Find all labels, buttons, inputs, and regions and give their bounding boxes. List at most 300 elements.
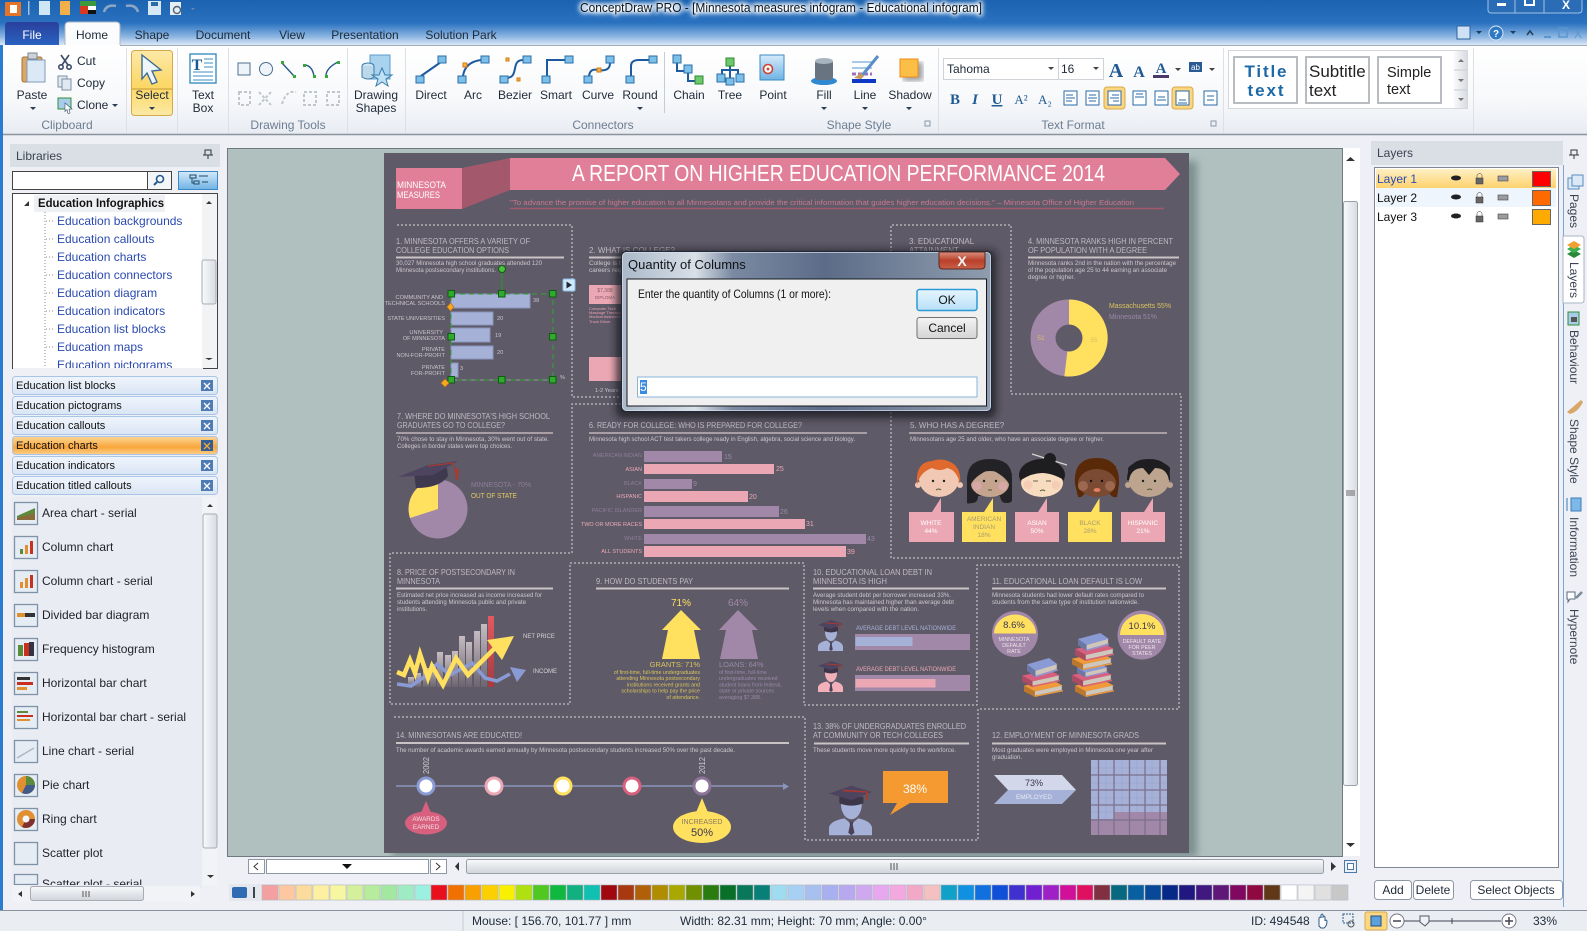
panel 14: minnesotans are educated: The number of academic awards earned annually by Minnesota postsecondary students increased 50% over the past decade. bbox=[396, 747, 735, 754]
chart library list: Line chart - serial bbox=[42, 744, 134, 758]
panel: layers bbox=[1371, 141, 1579, 900]
mission quote: "To advance the promise of higher education to all Minnesotans and provide the critical information that guides higher education decisions." – Minnesota Office of Higher Education bbox=[510, 198, 1134, 207]
library tree: Education list blocks bbox=[57, 322, 166, 336]
degree boxes: AMERICAN bbox=[967, 516, 1001, 523]
panel 2: what is college: Truck Driver bbox=[589, 319, 611, 324]
panel 2: what is college: $7,388 bbox=[597, 288, 613, 294]
callout: 38% bbox=[883, 771, 948, 815]
icon: male graduate bbox=[818, 620, 843, 651]
degree boxes: ASIAN bbox=[1027, 520, 1047, 527]
panel 2: what is college: 2. WHAT IS COLLEGE? bbox=[589, 246, 676, 255]
badge: peer states: DEFAULT RATE bbox=[1123, 639, 1162, 645]
panel 10: loan debt: MINNESOTA IS HIGH bbox=[813, 577, 887, 586]
panel 11: loan default bbox=[992, 577, 1166, 697]
quantity input: 5 bbox=[640, 380, 647, 394]
layer buttons: Select Objects bbox=[1477, 883, 1555, 897]
other tabs: View bbox=[279, 28, 305, 42]
arrow: grants: scholarships to help pay the price bbox=[621, 688, 700, 694]
side tabs: Information bbox=[1567, 517, 1581, 577]
left window edge bbox=[0, 45, 3, 911]
panel 6: ready for college: Minnesota high school ACT test takers college ready in English, algebra, social science and biology. bbox=[589, 436, 855, 443]
degree boxes: 50% bbox=[1030, 528, 1044, 535]
arrow: loans: 64% bbox=[728, 598, 748, 609]
callout: awards earned: AWARDS bbox=[412, 816, 440, 823]
chart library list: Column chart bbox=[42, 540, 114, 554]
bar chart: institutions: PRIVATE bbox=[422, 365, 445, 371]
header: minnesota measures: MINNESOTA bbox=[397, 180, 446, 190]
help icons bbox=[1457, 26, 1582, 41]
chart: price and income bbox=[397, 616, 557, 687]
arrow: grants bbox=[614, 598, 701, 701]
timeline: 2002 bbox=[422, 756, 431, 774]
arrow: grants: GRANTS: 71% bbox=[650, 660, 700, 669]
icon: pages bbox=[1568, 175, 1583, 189]
icon: copy bbox=[58, 76, 71, 90]
degree boxes: 18% bbox=[977, 532, 991, 539]
face: american indian bbox=[967, 459, 1012, 504]
library tree: Education charts bbox=[57, 250, 146, 264]
connectors group: Chain bbox=[673, 88, 705, 102]
clipboard group: Clone bbox=[77, 98, 109, 112]
library tabs: Education callouts bbox=[16, 420, 106, 432]
select button bbox=[132, 50, 172, 116]
icon: behaviour bbox=[1568, 312, 1579, 325]
panel 10: loan debt bbox=[813, 568, 970, 692]
face: black bbox=[1075, 458, 1119, 497]
arrow: grants: of attendance. bbox=[666, 695, 700, 701]
chart: price and income: NET PRICE bbox=[523, 634, 555, 640]
window title: ConceptDraw PRO - [Minnesota measures infogram - Educational infogram] bbox=[580, 1, 982, 15]
chart library list: Horizontal bar chart bbox=[42, 676, 147, 690]
panel 9: how students pay bbox=[596, 577, 789, 701]
arrow: 73% employed: EMPLOYED bbox=[1016, 794, 1052, 801]
panel 1: education options bbox=[385, 237, 575, 387]
badge: minnesota default: RATE bbox=[1007, 649, 1021, 655]
badge: minnesota default: DEFAULT bbox=[1002, 643, 1026, 649]
degree boxes: 21% bbox=[1136, 528, 1150, 535]
panel 7: where graduates go bbox=[396, 412, 553, 538]
library tabs bbox=[12, 376, 218, 494]
callout: 38%: 38% bbox=[903, 782, 927, 796]
panel 2: what is college: College is the bbox=[589, 260, 628, 267]
icon: information bbox=[1567, 498, 1581, 511]
bar chart: readiness: 25 bbox=[776, 466, 784, 473]
shape style group: Line bbox=[854, 88, 877, 102]
library tabs: Education charts bbox=[16, 440, 98, 452]
library tree: Education Infographics bbox=[38, 196, 164, 210]
icon: layers bbox=[1567, 241, 1581, 258]
panel 1: education options: 30,027 Minnesota high school graduates attended 120 bbox=[396, 260, 542, 267]
panel 12: employment: Most graduates were employed in Minnesota one year after bbox=[992, 747, 1154, 754]
text box tool bbox=[190, 54, 216, 115]
degree boxes: 28% bbox=[1083, 528, 1097, 535]
close button: X bbox=[957, 253, 967, 269]
bar chart: institutions: OF MINNESOTA bbox=[403, 336, 445, 342]
text format group: A₂ bbox=[1038, 92, 1052, 107]
icon: graduate figure bbox=[829, 786, 872, 835]
text style gallery: Simple bbox=[1387, 65, 1431, 81]
panel 14: minnesotans are educated bbox=[396, 731, 789, 843]
prompt text: Enter the quantity of Columns (1 or more): bbox=[638, 287, 831, 301]
layer rows: Layer 3 bbox=[1377, 210, 1417, 224]
library tree: Education connectors bbox=[57, 268, 172, 282]
text style gallery: Title bbox=[1244, 62, 1286, 81]
panel 2: what is college bbox=[589, 246, 676, 394]
drawing tools bbox=[238, 61, 340, 132]
colour palette bbox=[229, 884, 1348, 901]
text style gallery: Subtitle bbox=[1309, 62, 1366, 81]
callout: awards earned: EARNED bbox=[413, 824, 440, 831]
chart library list: Area chart - serial bbox=[42, 506, 137, 520]
Home tab bbox=[65, 22, 120, 46]
canvas bbox=[227, 148, 1342, 857]
chart library list bbox=[12, 497, 217, 902]
library tree: Education maps bbox=[57, 340, 143, 354]
panel 4: population with a degree: degree or higher. bbox=[1028, 274, 1075, 281]
side tabs: Pages bbox=[1567, 194, 1581, 228]
bar chart: institutions: TECHNICAL SCHOOLS bbox=[385, 301, 445, 307]
text style gallery: text bbox=[1248, 81, 1284, 100]
panel 2: what is college: Computer Tech bbox=[589, 306, 616, 311]
panel 5: who has a degree: 5. WHO HAS A DEGREE? bbox=[910, 421, 1005, 430]
text box tool: Box bbox=[193, 101, 213, 115]
status bar: Mouse: [ 156.70, 101.77 ] mm bbox=[472, 914, 631, 928]
bar chart: readiness: HISPANIC bbox=[616, 494, 642, 500]
arrow: grants: attending Minnesota postsecondary bbox=[616, 676, 700, 682]
help icons: ? bbox=[1493, 29, 1499, 40]
layer buttons: Delete bbox=[1416, 883, 1451, 897]
arrow: loans: LOANS: 64% bbox=[719, 660, 764, 669]
arrow: 73% employed: 73% bbox=[1025, 778, 1043, 788]
face: white bbox=[915, 460, 963, 497]
chart library list: Horizontal bar chart - serial bbox=[42, 710, 186, 724]
title bar bbox=[0, 0, 1587, 46]
panel 7: where graduates go: OUT OF STATE bbox=[471, 491, 517, 500]
other tabs: Document bbox=[196, 28, 251, 42]
drawing shapes: Shapes bbox=[356, 101, 396, 115]
layer buttons bbox=[1374, 880, 1562, 900]
text format group: A bbox=[1156, 61, 1167, 77]
connectors group: Direct bbox=[415, 88, 447, 102]
panel 2: what is college: 1-2 Years bbox=[595, 388, 619, 394]
library tabs: Education list blocks bbox=[16, 380, 116, 392]
text format group: A² bbox=[1014, 92, 1028, 107]
panel 8: price of postsecondary: MINNESOTA bbox=[397, 577, 441, 586]
infographic page bbox=[384, 153, 1189, 853]
callout: increased 50% bbox=[673, 798, 731, 843]
arrow: loans: state or private sources bbox=[719, 688, 774, 694]
panel 10: loan debt: levels when compared with the nation. bbox=[813, 606, 919, 613]
help icons: X bbox=[1574, 27, 1582, 41]
bar chart: readiness: 9 bbox=[693, 481, 697, 488]
clipboard group: Paste bbox=[17, 88, 48, 102]
timeline: 2012 bbox=[698, 756, 707, 774]
panel 9: how students pay: 9. HOW DO STUDENTS PAY bbox=[596, 577, 694, 586]
callout: increased 50%: 50% bbox=[691, 827, 713, 839]
bar chart: readiness: WHITE bbox=[624, 536, 642, 542]
panel 8: price of postsecondary bbox=[396, 568, 557, 687]
connectors group: Bezier bbox=[498, 88, 532, 102]
bar chart: readiness: ALL STUDENTS bbox=[601, 549, 642, 555]
text format group bbox=[944, 58, 1217, 132]
panel 2: what is college: Medical Assistant bbox=[589, 314, 621, 319]
debt bars: AVERAGE DEBT LEVEL NATIONWIDE bbox=[856, 667, 956, 673]
donut chart bbox=[1030, 299, 1108, 376]
face: hispanic bbox=[1125, 459, 1173, 497]
bar chart: readiness: 26 bbox=[780, 509, 788, 516]
panel 4: population with a degree bbox=[1028, 237, 1179, 376]
panel 4: population with a degree: Minnesota 51% bbox=[1109, 312, 1157, 321]
library tree bbox=[12, 194, 218, 374]
panel 10: loan debt: 10. EDUCATIONAL LOAN DEBT IN bbox=[813, 568, 932, 577]
bar chart: institutions: PRIVATE bbox=[422, 347, 445, 353]
arrow: grants: institutions received grants and bbox=[627, 682, 700, 688]
text format group: A bbox=[1133, 64, 1145, 81]
panel 11: loan default: students from the same type of institution nationwide. bbox=[992, 599, 1139, 606]
header: minnesota measures: MEASURES bbox=[397, 190, 440, 200]
text style gallery: text bbox=[1387, 82, 1410, 98]
icon: tall book stack bbox=[1072, 633, 1114, 697]
badge: peer states: FOR PEER bbox=[1128, 645, 1156, 651]
text format group: A bbox=[1109, 60, 1124, 82]
search box bbox=[12, 172, 218, 190]
panel 2: what is college: DIPLOMA bbox=[595, 295, 615, 300]
bar chart: readiness: 20 bbox=[749, 494, 757, 501]
cancel button bbox=[917, 318, 977, 338]
text format group: Tahoma bbox=[947, 62, 990, 76]
panel 12: employment: graduation. bbox=[992, 754, 1022, 761]
text box tool: Text bbox=[192, 88, 215, 102]
connectors group: Smart bbox=[540, 88, 573, 102]
drawing shapes bbox=[354, 55, 398, 115]
bar chart: readiness: AMERICAN INDIAN bbox=[593, 453, 642, 459]
side tabs: Shape Style bbox=[1567, 419, 1581, 484]
bar chart: institutions: 20 bbox=[497, 350, 503, 356]
panel 7: where graduates go: 70% chose to stay in Minnesota, 30% went out of state. bbox=[397, 436, 549, 443]
panel 2: what is college: Massage Therapist bbox=[589, 310, 624, 315]
panel 2: what is college: careers require bbox=[589, 267, 632, 274]
other tabs: Shape bbox=[135, 28, 170, 42]
panel 12: employment: 12. EMPLOYMENT OF MINNESOTA GRADS bbox=[992, 731, 1139, 740]
icon: fill bbox=[811, 58, 837, 85]
bar chart: readiness: PACIFIC ISLANDER bbox=[592, 508, 642, 514]
panel 4: population with a degree: of the population age 25 to 44 earning an associate bbox=[1028, 267, 1167, 274]
panel 13: community colleges: These students move more quickly to the workforce. bbox=[813, 747, 956, 754]
shape style group bbox=[811, 56, 932, 132]
drawing shapes: Drawing bbox=[354, 88, 398, 102]
connectors group: Round bbox=[622, 88, 658, 102]
panel: libraries bbox=[10, 144, 220, 902]
layer buttons: Add bbox=[1382, 883, 1404, 897]
chart library list: Scatter plot bbox=[42, 846, 103, 860]
bar chart: readiness: ASIAN bbox=[625, 467, 642, 473]
degree boxes bbox=[909, 498, 1165, 542]
panel: libraries: Libraries bbox=[16, 149, 62, 163]
library tree: Education diagram bbox=[57, 286, 157, 300]
clipboard group: Clipboard bbox=[41, 118, 93, 132]
layer rows: Layer 1 bbox=[1377, 172, 1417, 186]
bar chart: institutions: COMMUNITY AND bbox=[396, 295, 443, 301]
degree boxes: BLACK bbox=[1079, 520, 1101, 527]
arrow: 73% employed bbox=[994, 775, 1076, 804]
panel 7: where graduates go: 7. WHERE DO MINNESOTA'S HIGH SCHOOL bbox=[397, 412, 550, 421]
connectors group bbox=[415, 52, 787, 132]
library tabs: Education indicators bbox=[16, 460, 116, 472]
chart library list: Ring chart bbox=[42, 812, 97, 826]
page navigator bar bbox=[227, 857, 1360, 879]
donut chart: 51 bbox=[1037, 335, 1045, 342]
side tabs: Hypernote bbox=[1567, 609, 1581, 665]
connectors group: Arc bbox=[464, 88, 482, 102]
File tab bbox=[5, 22, 59, 45]
selection handles bbox=[441, 266, 556, 387]
quantity input bbox=[638, 377, 977, 397]
other tabs bbox=[135, 28, 498, 42]
panel 13: community colleges: 13. 38% OF UNDERGRADUATES ENROLLED bbox=[813, 722, 966, 731]
panel 6: ready for college bbox=[581, 421, 875, 557]
panel 5: who has a degree: Minnesotans age 25 and older, who have an associate degree or higher. bbox=[910, 436, 1104, 443]
side tabs: Layers bbox=[1567, 262, 1581, 298]
timeline bbox=[396, 756, 789, 794]
panel 4: population with a degree: Massachusetts 55% bbox=[1109, 301, 1171, 310]
page shadow bbox=[392, 161, 1197, 857]
waffle chart bbox=[1091, 760, 1167, 835]
donut chart: 55 bbox=[1090, 337, 1098, 344]
connectors group: Curve bbox=[582, 88, 614, 102]
File tab: File bbox=[22, 28, 42, 42]
dialog title: Quantity of Columns bbox=[628, 257, 746, 272]
ribbon panel bbox=[0, 45, 1587, 134]
select button: Select bbox=[135, 88, 169, 102]
connectors group: Tree bbox=[718, 88, 742, 102]
panel 13: community colleges bbox=[813, 722, 969, 835]
text format group: I bbox=[971, 92, 979, 108]
clipboard group: Cut bbox=[77, 54, 96, 68]
library tree: Education callouts bbox=[57, 232, 154, 246]
panel 11: loan default: 11. EDUCATIONAL LOAN DEFAULT IS LOW bbox=[992, 577, 1142, 586]
panel 3: educational attainment: 3. EDUCATIONAL bbox=[909, 237, 975, 246]
panel 1: education options: 1. MINNESOTA OFFERS A VARIETY OF bbox=[396, 237, 530, 246]
panel 6: ready for college: 6. READY FOR COLLEGE: WHO IS PREPARED FOR COLLEGE? bbox=[589, 421, 802, 430]
bar chart: readiness: BLACK bbox=[624, 481, 642, 487]
window controls bbox=[1488, 0, 1582, 13]
badge: peer states: STATES bbox=[1132, 651, 1152, 657]
chart: price and income: INCOME bbox=[533, 669, 557, 675]
bar chart: readiness: 31 bbox=[806, 521, 814, 528]
panel 8: price of postsecondary: Estimated net price increased as income increased for bbox=[397, 592, 543, 599]
status bar: 33% bbox=[1533, 914, 1557, 928]
badge: minnesota default bbox=[992, 611, 1038, 657]
icon: cut bbox=[59, 55, 71, 69]
panel: layers: Layers bbox=[1377, 146, 1413, 160]
arrow: loans: student loans from federal, bbox=[719, 682, 782, 688]
other tabs: Presentation bbox=[331, 28, 399, 42]
bar chart: institutions: % bbox=[560, 375, 565, 381]
title banner: A REPORT ON HIGHER EDUCATION PERFORMANCE 2014 bbox=[572, 160, 1105, 186]
chart library list: Frequency histogram bbox=[42, 642, 155, 656]
bar chart: institutions: 20 bbox=[497, 316, 503, 322]
bar chart: institutions: NON-FOR-PROFIT bbox=[397, 353, 446, 359]
dialog: quantity of columns bbox=[616, 250, 996, 418]
debt bars bbox=[855, 626, 970, 691]
bar chart: institutions: STATE UNIVERSITIES bbox=[387, 316, 445, 322]
bar chart: institutions: UNIVERSITY bbox=[409, 330, 443, 336]
panel 7: where graduates go: MINNESOTA - 70% bbox=[471, 480, 531, 489]
title bar: ConceptDraw PRO - [Minnesota measures infogram - Educational infogram] bbox=[580, 1, 982, 15]
bar chart: readiness: 39 bbox=[847, 549, 855, 556]
ok button bbox=[917, 290, 977, 310]
text format group: B bbox=[950, 92, 960, 108]
quick access icons bbox=[5, 1, 195, 16]
icon: female graduate bbox=[818, 661, 843, 692]
badge: minnesota default: 8.6% bbox=[1003, 620, 1025, 631]
text box tool: T bbox=[192, 57, 203, 74]
degree boxes: HISPANIC bbox=[1128, 520, 1158, 527]
bar chart: readiness bbox=[581, 451, 875, 557]
text style gallery bbox=[1228, 50, 1468, 108]
text format group: 16 bbox=[1061, 62, 1075, 76]
connectors group: Connectors bbox=[572, 118, 634, 132]
panel 4: population with a degree: 4. MINNESOTA RANKS HIGH IN PERCENT bbox=[1028, 237, 1173, 246]
drawing tools: Drawing Tools bbox=[250, 118, 326, 132]
smart connector button bbox=[563, 279, 575, 291]
library tree: Education indicators bbox=[57, 304, 165, 318]
panel 7: where graduates go: Colleges in border states were top choices. bbox=[397, 443, 512, 450]
library tabs: Education pictograms bbox=[16, 400, 122, 412]
panel 1: education options: Minnesota postsecondary institutions. bbox=[396, 267, 496, 274]
library tabs: Education titled callouts bbox=[16, 480, 132, 492]
panel 3: educational attainment bbox=[909, 237, 975, 255]
connectors group: Point bbox=[759, 88, 787, 102]
bar chart: institutions: 38 bbox=[533, 298, 539, 304]
layer rows: Layer 2 bbox=[1377, 191, 1417, 205]
panel 4: population with a degree: OF POPULATION WITH A DEGREE bbox=[1028, 246, 1147, 255]
text format group: ab bbox=[1191, 63, 1200, 72]
chart library list: Pie chart bbox=[42, 778, 90, 792]
chart library list: Column chart - serial bbox=[42, 574, 153, 588]
layer rows bbox=[1376, 169, 1556, 224]
status bar bbox=[0, 910, 1587, 931]
callout: increased 50%: INCREASED bbox=[682, 819, 722, 826]
header: minnesota measures bbox=[396, 158, 510, 209]
icon: line bbox=[852, 56, 878, 83]
panel 8: price of postsecondary: students attending Minnesota public and private bbox=[397, 599, 526, 606]
other tabs: Solution Park bbox=[425, 28, 498, 42]
ok button: OK bbox=[938, 293, 956, 307]
shape style group: Fill bbox=[816, 88, 832, 102]
panel 4: population with a degree: Minnesota ranks 2nd in the nation with the percentage bbox=[1028, 260, 1176, 267]
shape style group: Shadow bbox=[888, 88, 932, 102]
ribbon tabs bbox=[5, 22, 498, 46]
chart library list: Divided bar diagram bbox=[42, 608, 149, 622]
icon: shape style bbox=[1567, 400, 1583, 414]
degree boxes: WHITE bbox=[921, 520, 942, 527]
callout: awards earned bbox=[405, 801, 447, 834]
status icons bbox=[1319, 912, 1516, 930]
icon: paste bbox=[22, 53, 45, 82]
panel 5: who has a degree bbox=[909, 421, 1173, 542]
arrow: loans: undergraduates received bbox=[719, 676, 778, 682]
badge: peer states: 10.1% bbox=[1129, 621, 1156, 632]
shape style group: Shape Style bbox=[827, 118, 892, 132]
side tabs: Behaviour bbox=[1567, 330, 1581, 384]
text format group: U bbox=[992, 92, 1003, 108]
panel 3: educational attainment: ATTAINMENT bbox=[909, 246, 959, 255]
bar chart: readiness: 15 bbox=[724, 454, 732, 461]
status bar: ID: 494548 bbox=[1251, 914, 1310, 928]
degree boxes: 44% bbox=[924, 528, 938, 535]
arrow: loans: averaging $7,388. bbox=[719, 695, 761, 701]
